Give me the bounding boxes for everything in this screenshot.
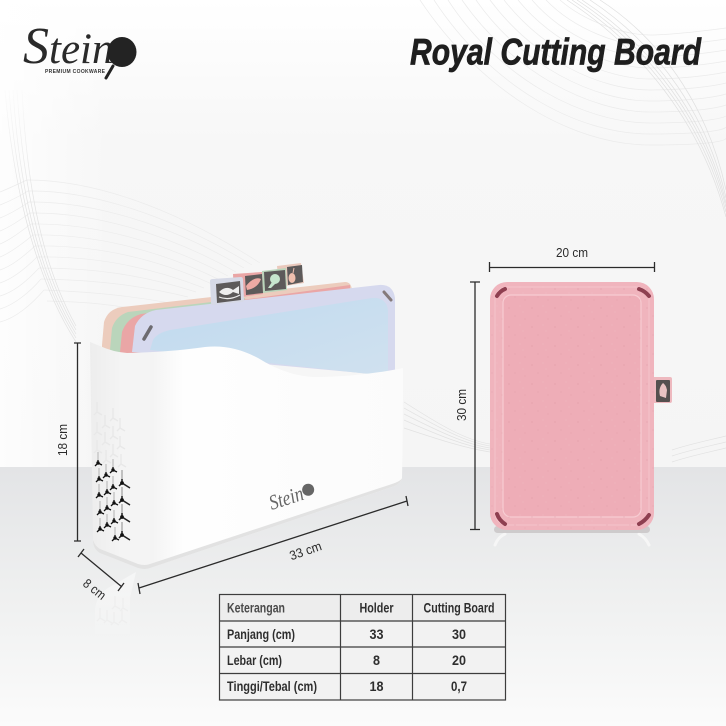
board reflection — [495, 534, 649, 545]
left line family — [0, 180, 260, 322]
holder logo: Stein — [266, 481, 306, 515]
mid-right faint lines — [404, 402, 726, 462]
board body — [490, 282, 654, 530]
dimension: holder length 33 cm: 33 cm — [287, 538, 324, 563]
tab: pear — [277, 263, 304, 287]
tab: fish — [210, 277, 244, 305]
dimension: board height 30 cm — [454, 282, 480, 530]
table text: 20 — [452, 653, 466, 668]
holder: white wavy container — [90, 342, 403, 569]
board: lavender with blue surface — [132, 285, 395, 376]
top-right line family — [420, 0, 726, 145]
table text: 0,7 — [451, 679, 467, 694]
dimension: board height 30 cm: 30 cm — [454, 389, 469, 421]
side tab with icon — [650, 377, 672, 403]
board shadow — [494, 526, 650, 533]
table text: Tinggi/Tebal (cm) — [227, 679, 317, 694]
table text: Cutting Board — [424, 600, 494, 616]
table rows — [220, 594, 506, 621]
holder floor reflection — [95, 572, 136, 640]
logo: Stein premium cookware: PREMIUM COOKWARE — [45, 69, 106, 75]
tab: broccoli — [262, 268, 287, 293]
dimension: board width 20 cm: 20 cm — [556, 245, 588, 260]
icon: frying pan — [106, 37, 136, 78]
product: pink cutting board — [490, 282, 672, 545]
board inner surface — [503, 295, 641, 517]
dimension: holder width 8 cm — [78, 549, 124, 603]
dimension: holder length 33 cm — [138, 496, 408, 594]
table text — [227, 600, 494, 694]
table text: Lebar (cm) — [227, 653, 282, 668]
left swoosh — [5, 90, 76, 342]
top-right swoosh — [567, 0, 726, 217]
tab: poultry — [233, 272, 263, 298]
table text: 30 — [452, 627, 466, 642]
table text: 8 — [373, 653, 380, 668]
board: peach — [102, 282, 352, 360]
dimension: holder height 18 cm — [55, 343, 81, 541]
board: pink — [120, 285, 350, 360]
dimension: board width 20 cm — [489, 245, 655, 272]
board: green — [110, 298, 245, 360]
holder bottom shading — [93, 478, 402, 569]
table text: Holder — [360, 600, 394, 616]
dimension: holder height 18 cm: 18 cm — [55, 424, 70, 456]
table text: 33 — [370, 627, 384, 642]
table text: Panjang (cm) — [227, 627, 295, 642]
table text: Keterangan — [227, 600, 285, 616]
product: boards in holder — [90, 263, 403, 640]
table text: 18 — [370, 679, 384, 694]
specification table — [220, 594, 506, 700]
index tabs with food icons — [210, 263, 304, 305]
logo: Stein premium cookware: Stein — [23, 18, 113, 75]
corner grips — [497, 289, 649, 524]
cutting boards stack — [102, 263, 395, 376]
vent holes — [94, 402, 130, 541]
dimension: holder width 8 cm: 8 cm — [80, 576, 109, 603]
